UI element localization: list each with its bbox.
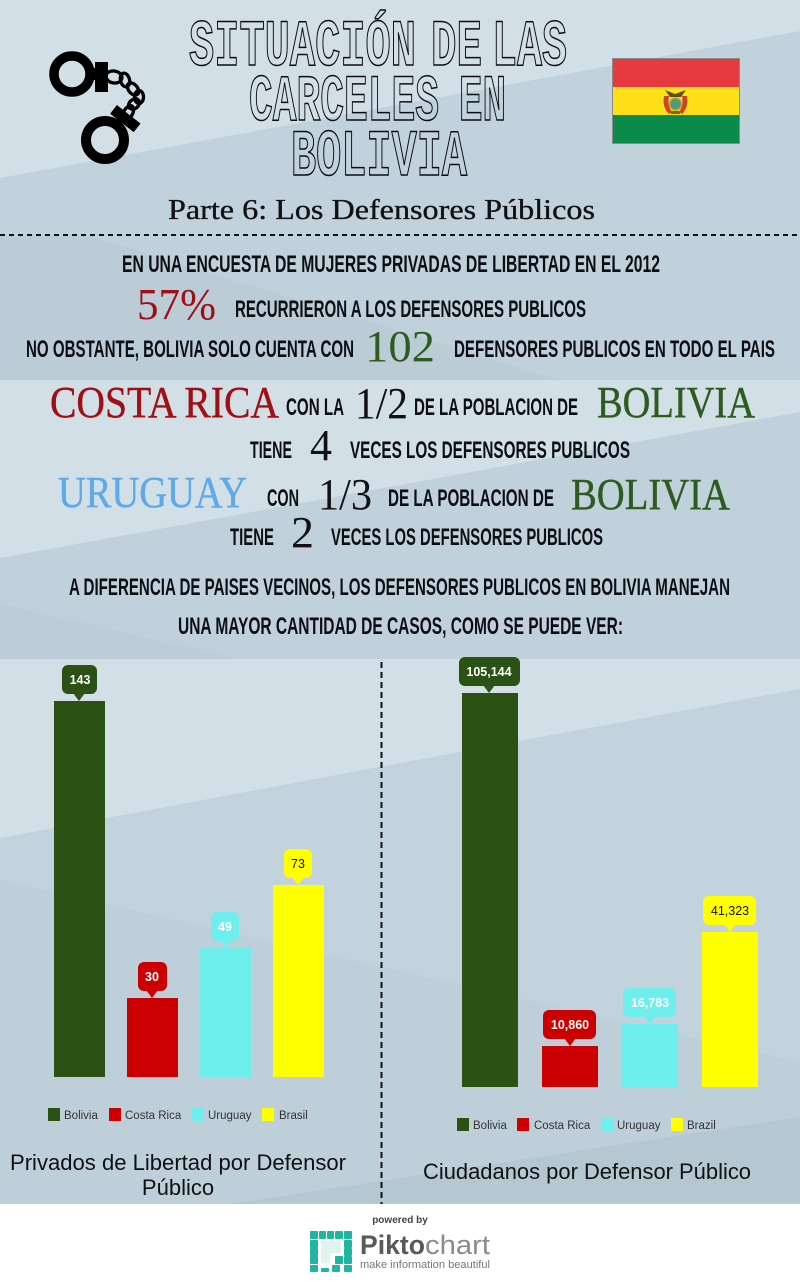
Costa Rica comparison: TIENE	[250, 437, 292, 464]
Costa Rica comparison: DE LA POBLACION DE	[414, 394, 578, 421]
bar: Brazil 41,323: 41,323	[711, 904, 749, 918]
survey text block: NO OBSTANTE, BOLIVIA SOLO CUENTA CON	[26, 336, 354, 363]
intro to charts	[69, 574, 730, 640]
icon: handcuffs	[54, 56, 144, 159]
legend: left chart: Brasil	[279, 1110, 308, 1122]
bar: Bolivia 143	[54, 665, 105, 1077]
title: LAS	[492, 10, 567, 85]
bar: Brazil 41,323	[702, 896, 758, 1087]
bar chart: ciudadanos por defensor	[457, 657, 758, 1132]
Costa Rica comparison: BOLIVIA	[597, 378, 755, 427]
footer: Piktochart logo: chart	[425, 1230, 491, 1260]
survey text block: RECURRIERON A LOS DEFENSORES PUBLICOS	[235, 296, 586, 323]
legend: left chart: Costa Rica	[125, 1110, 182, 1122]
footer: Piktochart logo	[310, 1215, 491, 1272]
footer: Piktochart logo: make information beautiful	[360, 1259, 490, 1271]
legend: right chart: Uruguay	[617, 1120, 661, 1132]
Uruguay comparison: CON	[267, 485, 299, 512]
Uruguay comparison: DE LA POBLACION DE	[388, 485, 554, 512]
bar: Costa Rica 10,860: 10,860	[551, 1018, 589, 1032]
title: EN	[459, 65, 506, 140]
Costa Rica comparison	[50, 378, 755, 470]
bar: Bolivia 105,144: 105,144	[466, 665, 512, 679]
footer: Piktochart logo: Pikto	[360, 1230, 425, 1260]
survey text block: 57%	[137, 280, 216, 329]
title: CARCELES	[249, 65, 439, 140]
bar: Uruguay 49: 49	[218, 920, 232, 934]
chart caption: privados de libertad: Público	[142, 1175, 214, 1200]
bar: Brasil 73: 73	[291, 857, 305, 871]
Uruguay comparison: 2	[291, 508, 314, 557]
legend: right chart: Costa Rica	[534, 1120, 591, 1132]
icon: Bolivian flag	[612, 58, 740, 144]
Uruguay comparison	[58, 468, 730, 557]
title: BOLIVIA	[291, 120, 467, 195]
legend: right chart	[457, 1118, 716, 1132]
legend: right chart: Bolivia	[473, 1120, 507, 1132]
bar: Bolivia 105,144	[459, 657, 520, 1087]
Costa Rica comparison: VECES LOS DEFENSORES PUBLICOS	[350, 437, 630, 464]
bar: Brasil 73	[273, 849, 324, 1077]
legend: left chart: Bolivia	[64, 1110, 98, 1122]
title	[189, 9, 567, 195]
title: SITUACIÓN	[189, 9, 416, 85]
bar: Uruguay 49	[200, 912, 251, 1077]
footer: Piktochart logo: powered by	[372, 1215, 428, 1226]
Costa Rica comparison: 4	[310, 421, 332, 470]
bar chart: privados de libertad por defensor	[48, 665, 324, 1122]
Costa Rica comparison: CON LA	[286, 394, 344, 421]
Costa Rica comparison: COSTA RICA	[50, 378, 279, 427]
Uruguay comparison: TIENE	[230, 524, 274, 551]
subtitle: Parte 6: Los Defensores Públicos	[168, 194, 595, 226]
Uruguay comparison: URUGUAY	[58, 468, 247, 517]
bar: Costa Rica 10,860	[542, 1010, 598, 1087]
legend: left chart: Uruguay	[208, 1110, 252, 1122]
bar: Bolivia 143: 143	[70, 673, 90, 687]
chart caption: privados de libertad: Privados de Libertad por Defensor	[10, 1150, 346, 1175]
chart caption: ciudadanos: Ciudadanos por Defensor Público	[423, 1159, 751, 1184]
survey text block: 102	[365, 322, 435, 371]
bar: Costa Rica 30: 30	[145, 970, 159, 984]
legend: left chart	[48, 1108, 308, 1122]
bar: Costa Rica 30	[127, 962, 178, 1077]
Uruguay comparison: 1/3	[318, 470, 372, 519]
survey text block	[26, 251, 775, 371]
Costa Rica comparison: 1/2	[355, 379, 408, 428]
Uruguay comparison: VECES LOS DEFENSORES PUBLICOS	[331, 524, 603, 551]
legend: right chart: Brazil	[687, 1120, 716, 1132]
title: DE	[431, 10, 482, 85]
chart caption: privados de libertad	[10, 1150, 346, 1200]
bar: Uruguay 16,783	[622, 988, 678, 1087]
Uruguay comparison: BOLIVIA	[571, 470, 730, 519]
bar: Uruguay 16,783: 16,783	[631, 996, 669, 1010]
